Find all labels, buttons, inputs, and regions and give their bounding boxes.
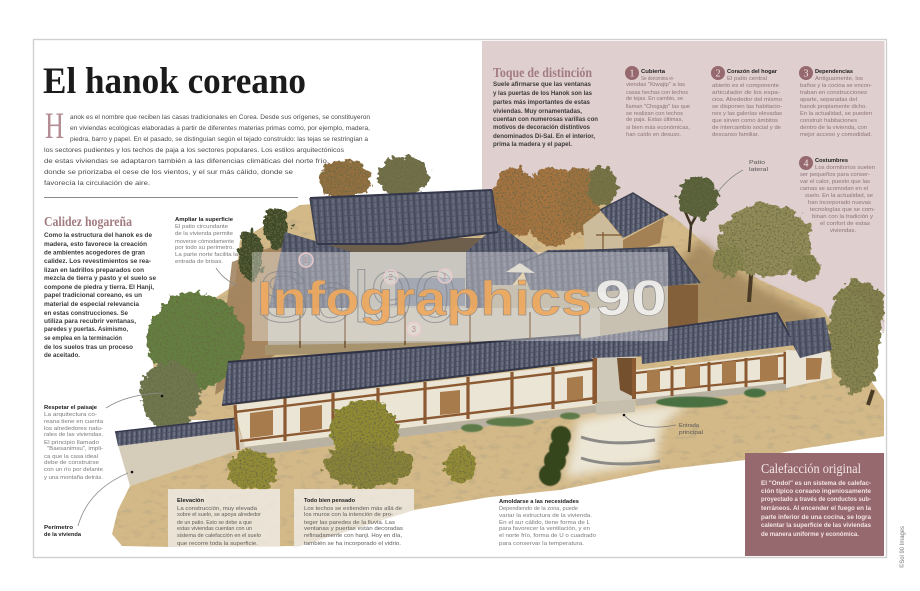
item 1: Cubierta: Se denomina vi- <box>641 76 674 82</box>
heading: Calefacción original <box>761 462 861 477</box>
item 1: Cubierta: Cubierta <box>641 69 666 75</box>
panel: Calidez hogareña: papel tradicional coreano, es un <box>44 292 142 299</box>
intro text: anok es el nombre que reciben las casas tradicionales en Corea. Desde sus orígenes, se constituyeron <box>70 114 370 121</box>
callout: Perímetro de la vivienda: Perímetro <box>44 525 74 531</box>
back outbuilding <box>583 193 668 254</box>
item 1: Cubierta: llaman "Chogajip" las que <box>626 104 690 110</box>
callout: Todo bien pensado: los muros con la intención de pro- <box>304 512 393 518</box>
item 3: Dependencias: aparte, separadas del <box>800 97 857 103</box>
item 4: Costumbres: var el calor, puesto que las <box>800 179 870 185</box>
item 2: Corazón del hogar: Corazón del hogar <box>727 69 778 75</box>
panel: Calidez hogareña: mezcla de tierra y pasto y el suelo se <box>44 275 156 282</box>
item 1: Cubierta: viendas "Kiwajip" a las <box>626 82 685 88</box>
panel: Toque de distinción: cuentan con numerosas varillas con <box>493 116 598 123</box>
callout: Elevación: estas viviendas cuentan con un <box>177 526 252 532</box>
panel: Calefacción original: terráneos. Al encender el fuego en la <box>761 505 871 512</box>
panel: Calidez hogareña: compone de piedra y tierra. El Hanji, <box>44 284 154 291</box>
callout: Ampliar la superficie: entrada de brisas. <box>175 259 223 265</box>
callout: Amoldarse a las necesidades: para favorecer la ventilación, y en <box>499 526 590 532</box>
callout: Ampliar la superficie: Ampliar la superficie <box>175 217 233 223</box>
callout: Amoldarse a las necesidades: variar la estructura de la vivienda. <box>499 513 592 519</box>
item 3: Dependencias: traban en construcciones <box>800 90 867 96</box>
item 2: Corazón del hogar <box>711 66 782 138</box>
callout: Respetar el paisaje: "Baesanimsu", impli- <box>47 446 103 452</box>
callout: Ampliar la superficie <box>175 217 239 286</box>
callout: Ampliar la superficie: moverse cómodamente <box>175 239 234 245</box>
item 2: Corazón del hogar: articulador de los espa- <box>712 90 780 96</box>
panel: Toque de distinción: viviendas. Muy ornamentadas, <box>493 108 582 115</box>
intro text <box>44 106 370 187</box>
panel: pink background <box>482 41 884 331</box>
panel: Calefacción original: El "Ondol" es un sistema de calefac- <box>761 480 871 487</box>
callout: Todo bien pensado: refinadamente con hanji. Hoy en día, <box>304 533 402 539</box>
leader dot <box>131 471 133 473</box>
terrain <box>112 190 884 547</box>
panel: Calidez hogareña: material de especial relevancia <box>44 301 139 308</box>
panel: Calidez hogareña <box>44 214 156 359</box>
callout: Perímetro de la vivienda <box>44 471 133 538</box>
item 3: Dependencias: construir habitaciones <box>800 118 857 124</box>
watermark <box>252 252 668 341</box>
right wing building <box>490 247 700 340</box>
callout: Ampliar la superficie: de la vivienda permite <box>175 231 233 237</box>
item 4: Costumbres: 4 <box>804 158 808 170</box>
item 4: Costumbres: Costumbres <box>815 158 848 164</box>
panel: Calidez hogareña: Como la estructura del hanok es de <box>44 232 152 239</box>
callout: Todo bien pensado: teger las paredes de la lluvia. Las <box>304 520 395 526</box>
item 4: Costumbres: el confort de estas <box>820 221 870 227</box>
front wall roof <box>222 335 593 405</box>
drop cap: H <box>45 106 64 147</box>
label: Patio lateral: Patio <box>749 160 765 166</box>
item 1: Cubierta: 1 <box>630 68 634 80</box>
item 2: Corazón del hogar: nes y las galerías elevadas <box>712 111 782 117</box>
item 1: Cubierta <box>625 66 690 138</box>
courtyard and rear wings <box>268 232 352 312</box>
callout: Elevación: La construcción, muy elevada <box>177 506 258 512</box>
label: Patio lateral: lateral <box>749 167 768 173</box>
panel: Calidez hogareña: de aceitado. <box>44 352 80 359</box>
main roof <box>310 190 498 244</box>
callout: Elevación: sobre el suelo, se apoya alrededor <box>177 512 261 518</box>
item 1: Cubierta: han caído en desuso. <box>626 132 681 138</box>
trees behind the house <box>239 156 617 280</box>
callout: Respetar el paisaje: Respetar el paisaje <box>44 405 97 411</box>
back hill shading <box>640 240 825 330</box>
panel: Toque de distinción: Suele afirmarse que las ventanas <box>493 81 591 88</box>
item 4: Costumbres <box>799 156 875 234</box>
item 3: Dependencias: En la actualidad, se pueden <box>800 111 872 117</box>
callout: Amoldarse a las necesidades: el norte frío, forma de U o cuadrado <box>499 533 596 539</box>
callout: Ampliar la superficie: El patio circundante <box>175 224 228 230</box>
leader line <box>216 268 238 286</box>
label: Entrada principal: principal <box>679 430 703 436</box>
leader line <box>78 473 128 526</box>
item 1: Cubierta: se realizan con techos <box>626 111 683 117</box>
panel: Calidez hogareña: lizan en ladrillos preparados con <box>44 267 144 274</box>
illustration: hanok scene <box>112 156 884 547</box>
intro text: en viviendas ecológicas elaboradas a partir de diferentes materias primas como, por ejemplo, madera, <box>70 125 370 132</box>
callout: Respetar el paisaje: rales de las viviendas. <box>44 432 103 438</box>
callout: Elevación: de un patio. Esto se debe a que <box>177 520 252 526</box>
callout: Respetar el paisaje: los alrededores natu- <box>44 426 103 432</box>
panel: Toque de distinción: denominados Di-Sal. En el interior, <box>493 133 595 140</box>
item 3: Dependencias: 3 <box>804 68 808 80</box>
gravel path <box>565 402 690 478</box>
watermark: 1 <box>304 256 308 265</box>
leader line <box>718 170 743 192</box>
heading: Calidez hogareña <box>44 214 132 229</box>
callout: Respetar el paisaje: con un río por delante <box>44 467 103 473</box>
watermark: Sol90 <box>257 258 457 338</box>
item 3: Dependencias: Dependencias <box>815 69 853 75</box>
item 4: Costumbres: viviendas. <box>830 228 856 234</box>
callout: Amoldarse a las necesidades: Amoldarse a las necesidades <box>499 499 579 505</box>
leader line <box>106 393 162 408</box>
panel: Calidez hogareña: utiliza para recubrir ventanas, <box>44 318 136 325</box>
low perimeter wall <box>115 418 246 486</box>
far right tree overlap <box>832 297 880 393</box>
panel: Calidez hogareña: madera, esto favorece la creación <box>44 241 147 248</box>
label: Patio lateral <box>718 160 768 192</box>
stone steps <box>581 437 660 464</box>
item 4: Costumbres: Los dormitorios suelen <box>815 165 875 171</box>
item 2: Corazón del hogar: 2 <box>716 68 720 80</box>
watermark: 2 <box>388 273 394 282</box>
callout: Amoldarse a las necesidades: para conservar la temperatura. <box>499 541 584 547</box>
panel: Calefacción original: de manera uniforme y económica. <box>761 531 859 538</box>
label: Entrada principal <box>623 414 703 436</box>
item 1: Cubierta: casas hechas con techos <box>626 90 688 96</box>
callout: Ampliar la superficie: por todo su perímetro. <box>175 245 234 251</box>
intro text: de estas viviendas se adaptaron también a las diferencias climáticas del norte frío, <box>44 158 329 165</box>
panel: Calefacción original <box>745 453 884 556</box>
panel: Toque de distinción: y las puertas de los Hanok son las <box>493 90 592 97</box>
item 2: Corazón del hogar: abierto es el componente <box>712 83 779 89</box>
panel: Calefacción original: ción típico coreano ingeniosamente <box>761 488 872 495</box>
intro text: los sectores pudientes y los techos de paja a los sectores populares. Los estilos arquitectónicos <box>44 147 345 154</box>
callout: Todo bien pensado: Los techos se extienden más allá de <box>304 506 402 512</box>
leader dot <box>623 414 625 416</box>
callout: Respetar el paisaje: y una montaña detrás. <box>44 475 103 481</box>
watermark: 1 <box>442 272 448 281</box>
right trees <box>678 177 884 405</box>
callout: Respetar el paisaje: El principio llamado <box>44 440 99 446</box>
item 2: Corazón del hogar: de intercambio social y de <box>712 125 781 131</box>
item 4: Costumbres: tecnologías que se com- <box>810 207 875 213</box>
lower house wall <box>268 308 600 348</box>
callout: Elevación: que recorre toda la superficie. <box>177 541 258 547</box>
panel: Toque de distinción <box>493 65 598 148</box>
item 4: Costumbres: han incorporado nuevas <box>808 200 871 206</box>
item 3: Dependencias: hanok propiamente dicho. <box>800 104 867 110</box>
gate <box>580 330 652 415</box>
item 2: Corazón del hogar: se disponen las habitacio- <box>712 104 782 110</box>
callout: Amoldarse a las necesidades <box>499 499 596 547</box>
panel: Calefacción original: proyectado a través de conductos sub- <box>761 496 871 503</box>
callout: Todo bien pensado: Todo bien pensado <box>304 498 356 504</box>
callout: Respetar el paisaje: La arquitectura co- <box>44 412 97 418</box>
intro text: donde se priorizaba el cese de los vientos, y el sur más cálido, donde se <box>44 169 293 176</box>
divider <box>44 197 298 198</box>
item 2: Corazón del hogar: descanso familiar. <box>712 132 759 138</box>
watermark: 3 <box>412 325 416 334</box>
left hill shading <box>215 240 290 395</box>
callout: Todo bien pensado: ventanas y puertas están decoradas <box>304 526 403 532</box>
watermark: 90 <box>595 270 667 326</box>
callout: Todo bien pensado: también se ha incorporado el vidrio. <box>304 541 401 547</box>
front wall <box>233 360 600 456</box>
item 4: Costumbres: camas se acomodan en el <box>800 186 868 192</box>
label: Entrada principal: Entrada <box>679 423 700 429</box>
intro text: favorecía la circulación de aire. <box>44 180 150 187</box>
callout: Elevación: Elevación <box>177 498 205 504</box>
watermark: Infographics <box>257 273 592 326</box>
panel: Calefacción original: parte inferior de una cocina, se logra <box>761 514 871 521</box>
left trees <box>140 292 244 429</box>
callout: Respetar el paisaje: reana tiene en cuenta <box>44 419 104 425</box>
item 1: Cubierta: si bien más económicas, <box>626 125 690 131</box>
panel: Calidez hogareña: de los suelos tras un proceso <box>44 344 133 351</box>
panel: Calefacción original: calentar la superficie de las viviendas <box>761 522 871 529</box>
callout: Respetar el paisaje <box>44 393 163 481</box>
panel: Toque de distinción: partes más importantes de estas <box>493 99 590 106</box>
callout: Elevación: sistema de calefacción en el suelo <box>177 533 261 539</box>
panel: Toque de distinción: prima la madera y el papel. <box>493 141 572 148</box>
right wall <box>636 313 832 406</box>
callout: Todo bien pensado <box>294 489 414 548</box>
panel: Toque de distinción: motivos de decoración distintivos <box>493 124 590 131</box>
leader line <box>625 416 676 427</box>
panel: Calidez hogareña: calidez. Los revestimientos se rea- <box>44 258 151 265</box>
item 3: Dependencias: Antiguamente, los <box>815 76 863 82</box>
item 2: Corazón del hogar: El patio central <box>727 76 767 82</box>
item 4: Costumbres: suelo. En la actualidad, se <box>805 193 873 199</box>
item 3: Dependencias: mejor acceso y comodidad. <box>800 132 872 138</box>
heading: Toque de distinción <box>493 65 592 80</box>
upper pavilion walls <box>320 238 490 268</box>
callout: Ampliar la superficie: La parte norte facilita la <box>175 252 239 258</box>
callout: Amoldarse a las necesidades: En el sur cálido, tiene forma de L <box>499 520 590 526</box>
hedges <box>461 388 766 432</box>
panel: Calidez hogareña: de ambientes acogedores de gran <box>44 250 145 257</box>
title: El hanok coreano <box>43 61 306 102</box>
intro text: piedra, barro y papel. En el pasado, se distinguían según el tejado construido: las tejas se restringían a <box>70 136 368 143</box>
item 4: Costumbres: ser pequeños para conser- <box>800 172 870 178</box>
item 3: Dependencias: baños y la cocina se encon- <box>800 83 872 89</box>
item 4: Costumbres: binan con la tradición y <box>812 214 873 220</box>
item 2: Corazón del hogar: cios. Alrededor del mismo <box>712 97 782 103</box>
item 3: Dependencias <box>799 66 872 138</box>
callout: Amoldarse a las necesidades: Dependiendo de la zona, puede <box>499 506 578 512</box>
item 3: Dependencias: dentro de la vivienda, con <box>800 125 867 131</box>
topiary <box>539 426 571 486</box>
panel: Calidez hogareña: paredes y puertas. Asimismo, <box>44 326 128 333</box>
item 2: Corazón del hogar: que sirven como ámbitos <box>712 118 778 124</box>
item 1: Cubierta: de paja. Estas últimas, <box>626 117 683 123</box>
credit: ©Sol 90 Images <box>899 526 906 568</box>
yellow shrubs <box>227 400 475 490</box>
callout: Elevación <box>168 489 280 547</box>
item 1: Cubierta: de tejas. En cambio, se <box>626 96 683 102</box>
panel: Calidez hogareña: en estas construcciones. Se <box>44 310 128 317</box>
callout: Respetar el paisaje: debe de construirse <box>44 460 99 466</box>
callout: Perímetro de la vivienda: de la vivienda <box>44 532 82 538</box>
callout: Respetar el paisaje: ca que la casa ideal <box>44 454 98 460</box>
panel: Calidez hogareña: se emplea en la terminación <box>44 335 122 342</box>
leader dot <box>161 395 163 397</box>
